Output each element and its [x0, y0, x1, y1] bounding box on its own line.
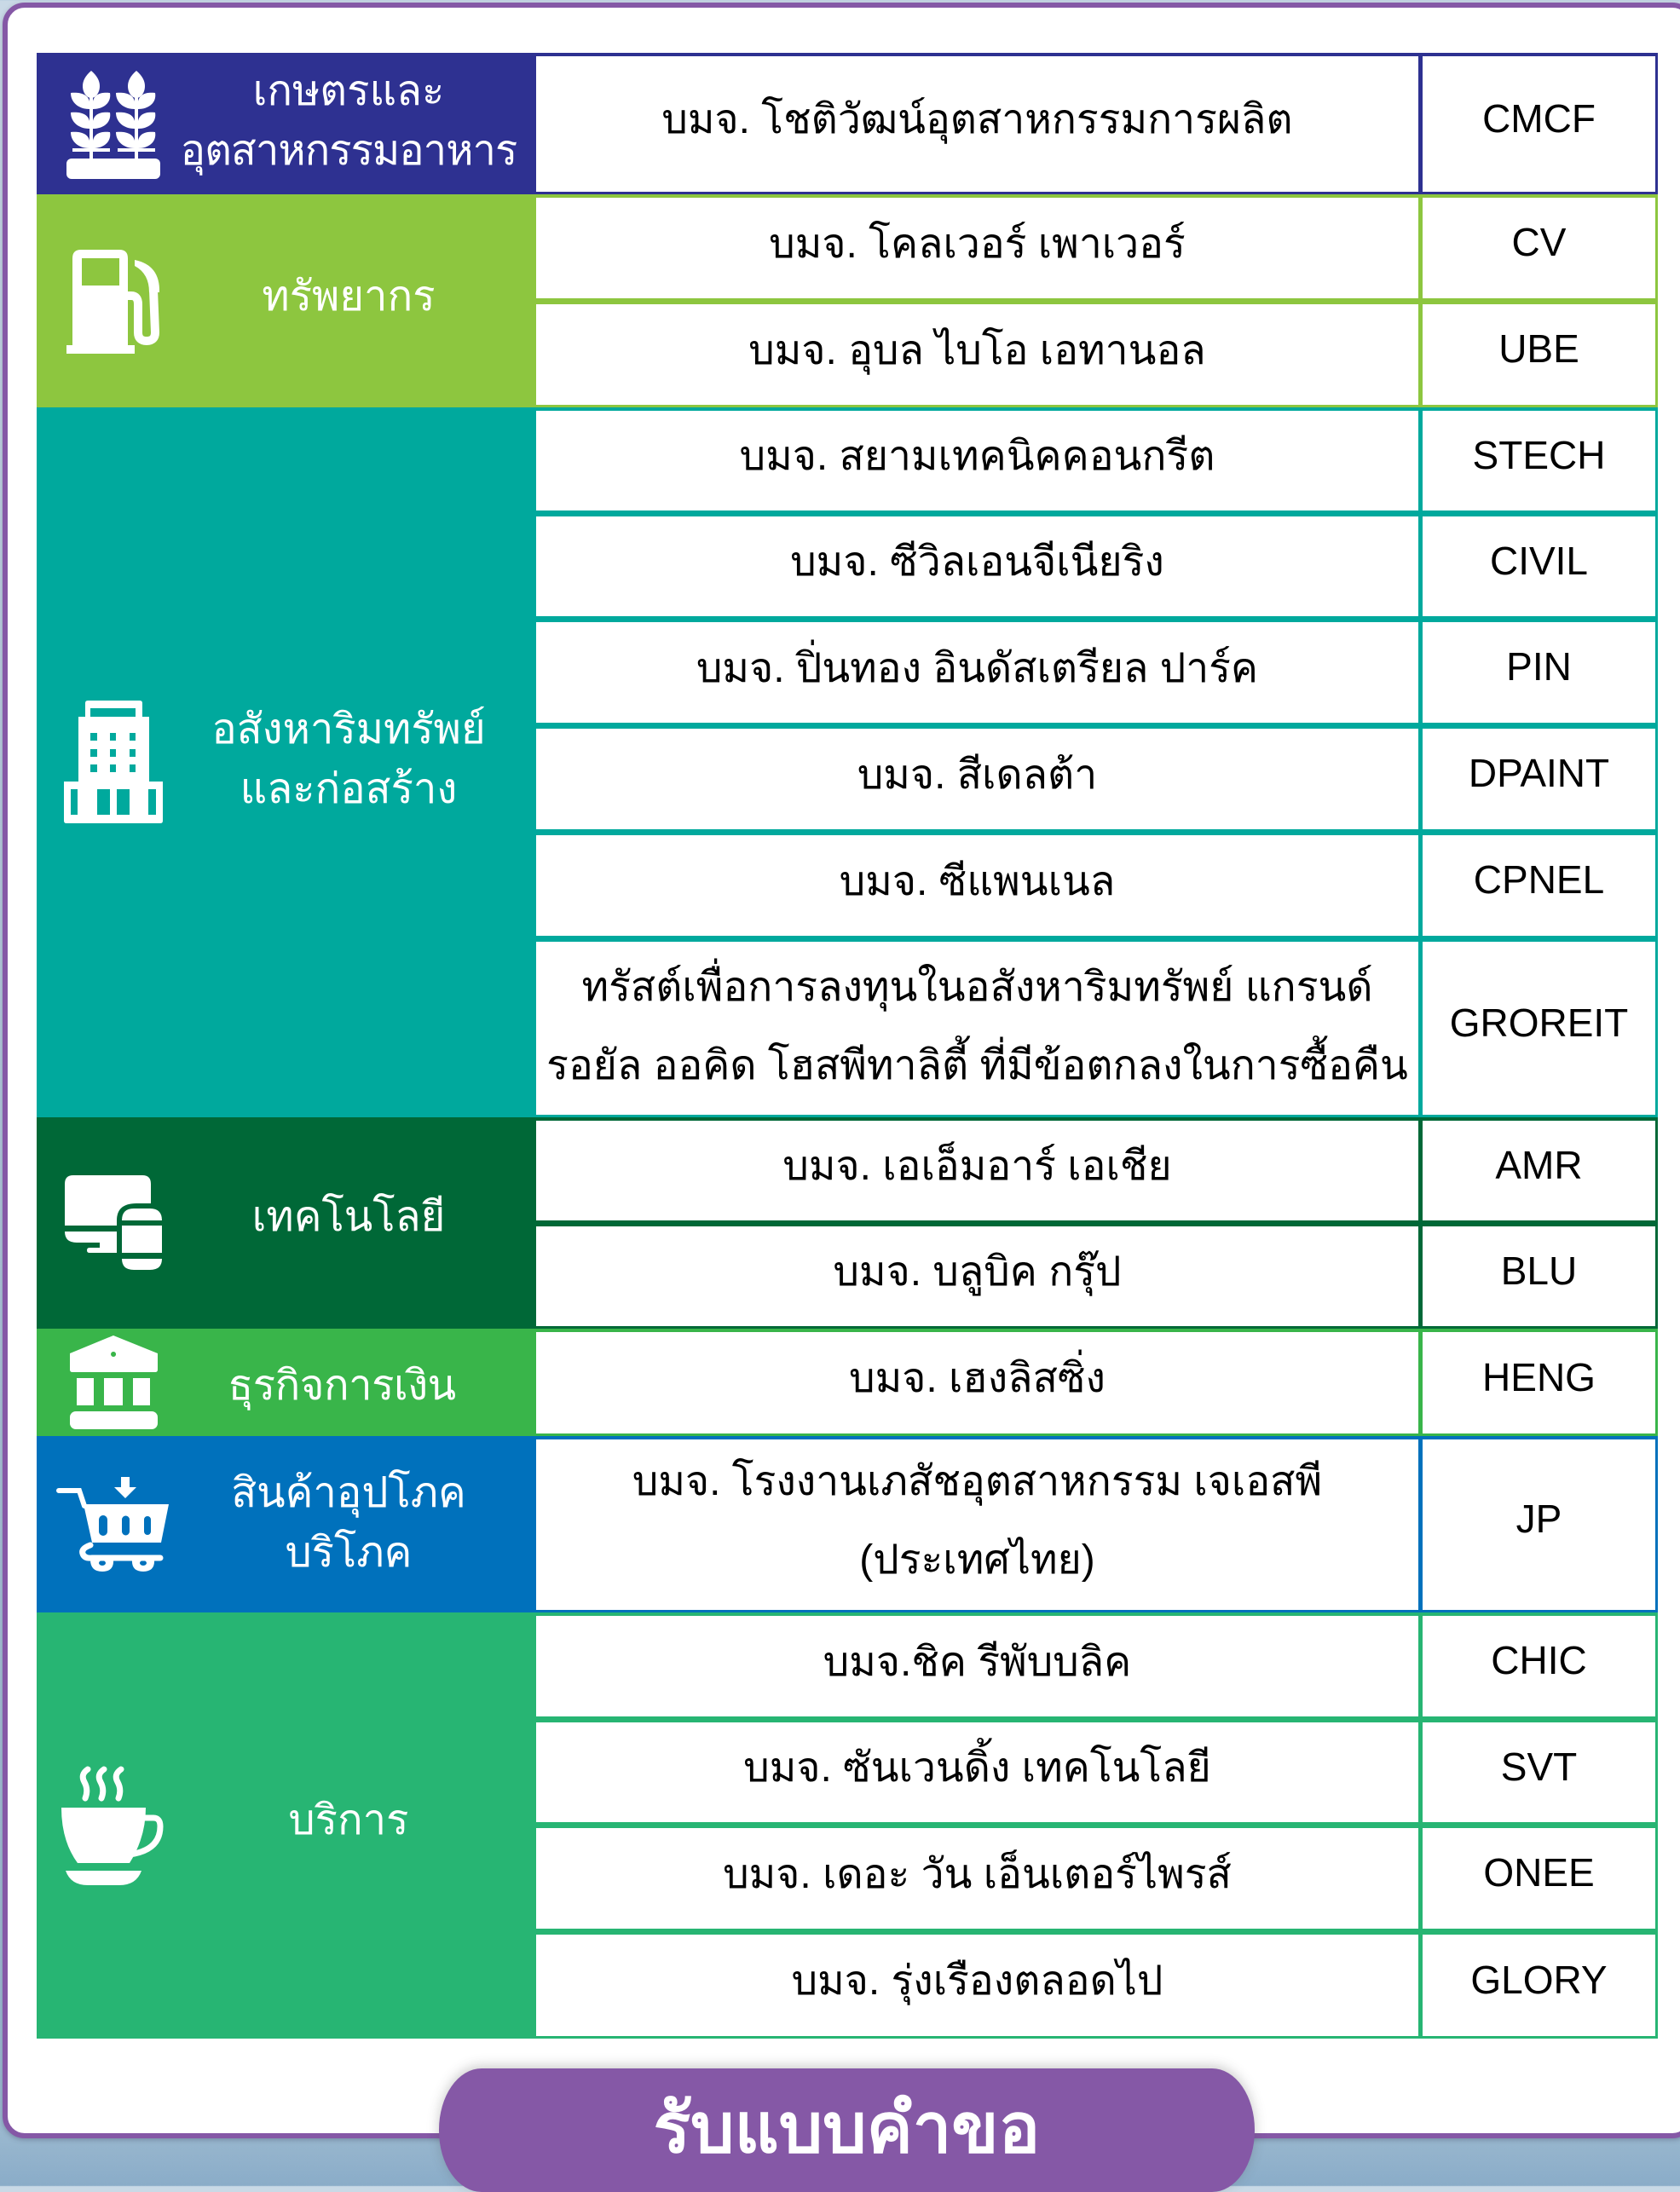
- row: CHIC: CHIC: [1491, 1638, 1587, 1682]
- row: GLORY: บมจ. รุ่งเรืองตลอดไป: [792, 1958, 1163, 2004]
- row: GLORY: [536, 1935, 1655, 2036]
- row: STECH: [536, 411, 1655, 511]
- row: GROREIT: GROREIT: [1450, 1001, 1628, 1045]
- row: CIVIL: CIVIL: [1490, 539, 1588, 583]
- row: SVT: SVT: [1501, 1744, 1577, 1788]
- category label: บริการ: [289, 1797, 408, 1843]
- category label: [231, 1469, 466, 1575]
- row: ONEE: บมจ. เดอะ วัน เอ็นเตอร์ไพรส์: [723, 1851, 1232, 1897]
- icon: wheat plants: [66, 71, 160, 179]
- category label: อสังหาริมทรัพย์: [211, 707, 486, 753]
- row: SVT: [536, 1722, 1655, 1822]
- row: JP: บมจ. โรงงานเภสัชอุตสาหกรรม เจเอสพี: [632, 1459, 1322, 1503]
- button: request form: รับแบบคำขอ: [654, 2091, 1040, 2167]
- category label: ทรัพยากร: [262, 274, 436, 320]
- band: agriculture and food: [37, 53, 1658, 194]
- row: UBE: [536, 304, 1655, 405]
- row: BLU: [536, 1226, 1655, 1326]
- row: GLORY: GLORY: [1470, 1957, 1608, 2001]
- row: AMR: [536, 1121, 1655, 1220]
- category label: และก่อสร้าง: [240, 766, 457, 812]
- row: CPNEL: บมจ. ซีแพนเนล: [840, 859, 1115, 903]
- row: GROREIT: ทรัสต์เพื่อการลงทุนในอสังหาริมทรัพย์ แกรนด์: [581, 965, 1372, 1010]
- row: CV: [536, 198, 1655, 298]
- row: UBE: UBE: [1498, 326, 1579, 371]
- row: DPAINT: บมจ. สีเดลต้า: [857, 752, 1097, 798]
- row: BLU: BLU: [1501, 1248, 1577, 1292]
- band: consumer products: [37, 1436, 1658, 1612]
- icon: fuel pump: [66, 250, 159, 354]
- row: PIN: บมจ. ปิ่นทอง อินดัสเตรียล ปาร์ค: [696, 646, 1258, 690]
- row: GROREIT: [536, 942, 1655, 1115]
- row: CPNEL: [536, 835, 1655, 936]
- row: BLU: บมจ. บลูบิค กรุ๊ป: [833, 1249, 1122, 1295]
- row: PIN: [536, 622, 1655, 723]
- category label: [181, 68, 517, 176]
- row: SVT: บมจ. ซันเวนดิ้ง เทคโนโลยี: [743, 1745, 1211, 1791]
- row: JP: JP: [1516, 1497, 1562, 1541]
- row: CV: CV: [1512, 220, 1566, 264]
- category label: [211, 706, 486, 812]
- button: request form: [439, 2068, 1255, 2192]
- category label: สินค้าอุปโภค: [231, 1469, 466, 1515]
- row: CHIC: [536, 1616, 1655, 1716]
- row: HENG: บมจ. เฮงลิสซิ่ง: [849, 1356, 1106, 1401]
- icon: office building: [64, 701, 163, 823]
- row: PIN: PIN: [1506, 644, 1572, 689]
- icon: bank: [70, 1335, 158, 1429]
- row: DPAINT: [536, 729, 1655, 829]
- band: services: [37, 1612, 1658, 2039]
- row: CHIC: บมจ.ชิค รีพับบลิค: [823, 1640, 1131, 1684]
- band: technology: [37, 1117, 1658, 1329]
- row: CV: บมจ. โคลเวอร์ เพาเวอร์: [769, 222, 1186, 266]
- category label: เกษตรและ: [253, 68, 444, 114]
- row: CMCF: บมจ. โชติวัฒน์อุตสาหกรรมการผลิต: [661, 97, 1293, 142]
- row: CMCF: CMCF: [1482, 95, 1596, 140]
- row: JP: (ประเทศไทย): [859, 1537, 1095, 1582]
- row: GROREIT: รอยัล ออคิด โฮสพีทาลิตี้ ที่มีข้อตกลงในการซื้อคืน: [546, 1043, 1408, 1088]
- category label: เทคโนโลยี: [252, 1194, 445, 1240]
- row: UBE: บมจ. อุบล ไบโอ เอทานอล: [748, 327, 1206, 373]
- row: CIVIL: บมจ. ซีวิลเอนจีเนียริง: [790, 539, 1164, 585]
- row: CMCF: [536, 56, 1655, 192]
- row: ONEE: [536, 1828, 1655, 1929]
- row: HENG: [536, 1332, 1655, 1433]
- category label: บริโภค: [286, 1529, 412, 1575]
- row: AMR: บมจ. เอเอ็มอาร์ เอเชีย: [782, 1144, 1172, 1189]
- icon: computer and phone: [65, 1175, 162, 1270]
- row: JP: [536, 1439, 1655, 1610]
- row: HENG: HENG: [1482, 1355, 1596, 1399]
- row: CPNEL: CPNEL: [1474, 857, 1604, 902]
- row: ONEE: ONEE: [1483, 1850, 1595, 1895]
- category label: ธุรกิจการเงิน: [228, 1363, 456, 1409]
- band: financials: [37, 1329, 1658, 1436]
- row: STECH: บมจ. สยามเทคนิคคอนกรีต: [740, 434, 1215, 479]
- band: resources: [37, 194, 1658, 407]
- category label: อุตสาหกรรมอาหาร: [181, 128, 517, 174]
- row: AMR: AMR: [1495, 1142, 1583, 1186]
- row: CIVIL: [536, 516, 1655, 616]
- row: STECH: STECH: [1473, 433, 1605, 477]
- row: DPAINT: DPAINT: [1469, 751, 1609, 795]
- icon: steaming cup: [61, 1766, 164, 1885]
- icon: shopping cart: [56, 1477, 169, 1572]
- band: property and construction: [37, 407, 1658, 1117]
